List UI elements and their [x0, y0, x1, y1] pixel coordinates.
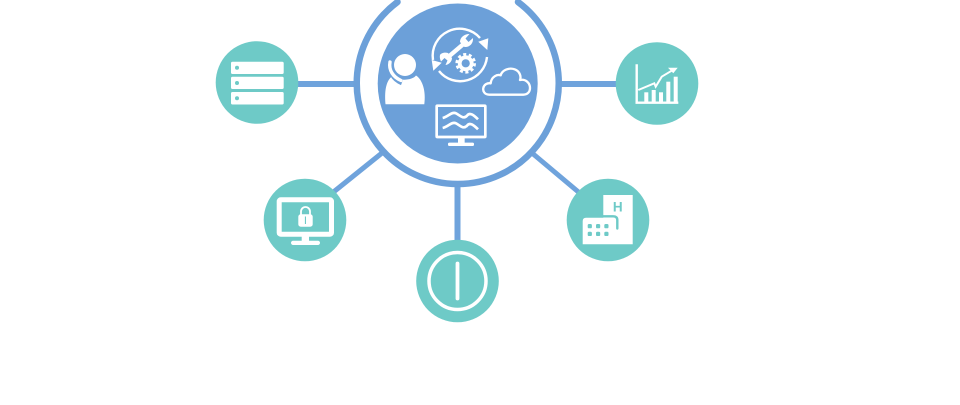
- icon: power symbol: [429, 252, 486, 310]
- icon: locked monitor: [279, 200, 332, 245]
- hub icons: [385, 29, 530, 146]
- icon: server stack: [231, 62, 284, 104]
- node: analytics: [616, 42, 698, 125]
- node: power: [416, 240, 499, 322]
- connector: lower right to hospital: [532, 153, 582, 195]
- icon: cloud: [483, 69, 530, 95]
- node: security: [264, 179, 346, 261]
- wrench: [447, 44, 464, 58]
- connector: lower left to lock: [331, 153, 382, 194]
- icon: maintenance cycle: [432, 29, 488, 81]
- node: server: [216, 41, 298, 124]
- icon: support agent: [385, 54, 425, 104]
- central hub: [378, 4, 538, 164]
- hub disc: [378, 4, 538, 164]
- icon: rising bar chart: [637, 64, 678, 103]
- connector: bottom to power: [454, 185, 460, 242]
- gear: [460, 57, 472, 69]
- icon: hospital building: H: [613, 199, 623, 214]
- outer ring: [357, 2, 559, 184]
- icon: monitor: [437, 106, 485, 146]
- connector: right to chart: [559, 81, 618, 87]
- node: hospital: [567, 179, 649, 261]
- connector: left to server: [296, 81, 356, 87]
